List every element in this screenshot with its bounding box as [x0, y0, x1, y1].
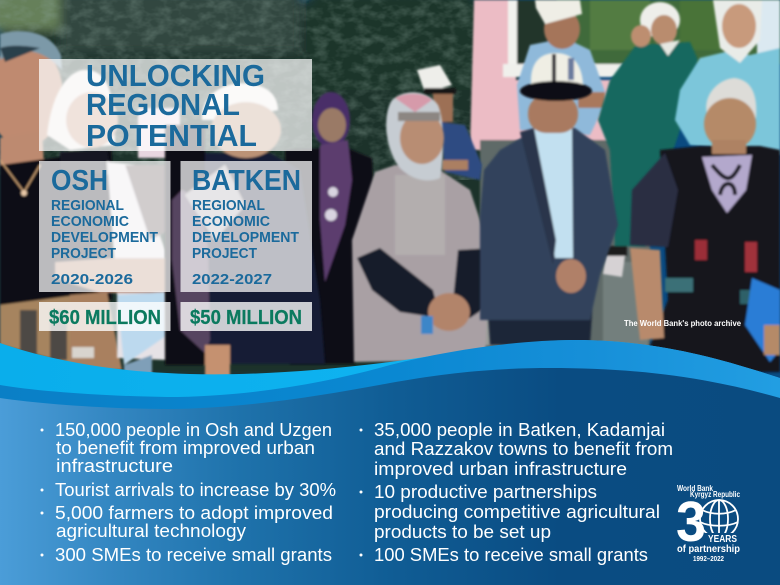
panel: Batken project: BATKEN [192, 165, 301, 197]
woman in purple scarf [285, 92, 376, 364]
background woman in light blue [675, 0, 780, 155]
man in suit and kalpak [480, 53, 618, 345]
second woman behind panel [47, 70, 180, 380]
Osh outcomes list: Tourist arrivals to increase by 30% [55, 480, 336, 500]
Batken funding amount [180, 302, 312, 331]
Osh funding amount [39, 302, 170, 331]
Osh funding amount: $60 MILLION [49, 307, 161, 329]
panel: Batken project [180, 161, 312, 292]
photo credit: The World Bank's photo archive [624, 319, 742, 328]
wave band [0, 340, 780, 585]
panel: Osh project: PROJECT [51, 245, 116, 262]
Batken outcomes list: 35,000 people in Batken, Kadamjai [374, 420, 665, 440]
Osh outcomes list: 150,000 people in Osh and Uzgen [55, 420, 332, 440]
logo: World Bank 30 years of partnership [676, 484, 740, 563]
panel: Osh project: DEVELOPMENT [51, 229, 158, 246]
panel: Batken project: 2022-2027 [192, 271, 272, 288]
panel: Batken project: ECONOMIC [192, 213, 270, 230]
Batken outcomes list [360, 420, 673, 565]
heading: POTENTIAL [86, 118, 257, 153]
Batken outcomes list: products to be set up [374, 522, 551, 542]
heading: REGIONAL [86, 87, 240, 122]
logo: World Bank 30 years of partnership: 3 [676, 490, 706, 554]
Osh outcomes list [40, 420, 336, 565]
panel: Osh project: OSH [51, 165, 108, 197]
panel: Batken project: REGIONAL [192, 197, 265, 214]
panel: Batken project: DEVELOPMENT [192, 229, 299, 246]
title panel [39, 58, 312, 153]
logo: World Bank 30 years of partnership: of partnership [677, 543, 740, 555]
Osh outcomes list: infrastructure [56, 456, 173, 476]
third woman with patterned shawl [165, 83, 325, 377]
dark blue information area [0, 368, 780, 585]
panel: Osh project [39, 161, 170, 292]
Batken outcomes list: 10 productive partnerships [374, 482, 597, 502]
logo: World Bank 30 years of partnership: YEARS [708, 534, 737, 545]
photo: community members gathered outdoors [0, 0, 780, 380]
Batken outcomes list: improved urban infrastructure [374, 459, 627, 479]
Osh outcomes list: 5,000 farmers to adopt improved [55, 503, 333, 523]
icon: globe [700, 500, 738, 538]
background woman in teal [598, 2, 698, 277]
panel: Osh project: REGIONAL [51, 197, 124, 214]
logo: World Bank 30 years of partnership: Kyrgyz Republic [690, 490, 740, 499]
Osh outcomes list: agricultural technology [56, 521, 247, 541]
pink wall and window [470, 0, 780, 357]
logo: World Bank 30 years of partnership: World Bank [677, 484, 713, 493]
Batken funding amount: $50 MILLION [190, 307, 302, 329]
Batken outcomes list: producing competitive agricultural [374, 502, 660, 522]
panel: Batken project: PROJECT [192, 245, 257, 262]
left woman with headscarf [0, 31, 122, 372]
front woman in embroidered vest [630, 78, 780, 372]
background man in blue shirt [517, 0, 605, 135]
panel: Osh project: 2020-2026 [51, 271, 133, 288]
woman in grey cardigan [352, 92, 497, 362]
Osh outcomes list: to benefit from improved urban [56, 438, 315, 458]
Batken outcomes list: 100 SMEs to receive small grants [374, 545, 648, 565]
Osh outcomes list: 300 SMEs to receive small grants [55, 545, 332, 565]
Batken outcomes list: and Razzakov towns to benefit from [374, 439, 673, 459]
heading: UNLOCKING [86, 58, 265, 93]
photo background: trees [0, 0, 520, 380]
heading [86, 58, 265, 153]
panel: Osh project: ECONOMIC [51, 213, 129, 230]
man with kalpak behind [417, 65, 482, 180]
logo: World Bank 30 years of partnership: 1992–2022 [693, 556, 724, 563]
